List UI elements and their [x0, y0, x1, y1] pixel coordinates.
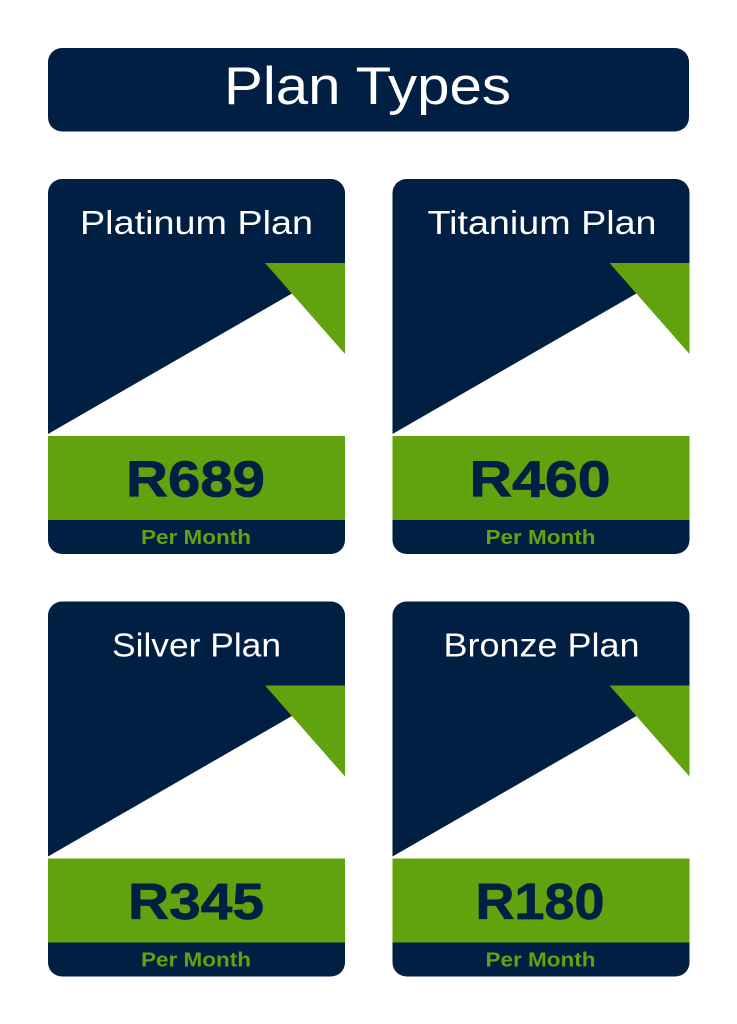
title banner: [48, 48, 689, 132]
panel: bronze plan: Bronze Plan: [444, 628, 640, 664]
panel: silver plan: R345: [128, 873, 264, 930]
panel: bronze plan: Per Month: [486, 948, 596, 972]
panel: titanium plan: R460: [470, 450, 610, 508]
panel: platinum plan: Per Month: [141, 526, 251, 549]
title: Plan Types: [224, 57, 511, 116]
panel: silver plan: Per Month: [141, 948, 251, 972]
panel: titanium plan: Per Month: [486, 526, 596, 549]
panel: silver plan: [48, 602, 345, 976]
panel: bronze plan: [392, 602, 690, 976]
panel: bronze plan: R180: [476, 873, 604, 930]
panel: platinum plan: R689: [126, 450, 265, 508]
panel: platinum plan: Platinum Plan: [80, 205, 313, 242]
panel: titanium plan: Titanium Plan: [428, 205, 656, 242]
panel: silver plan: Silver Plan: [112, 628, 281, 664]
panel: titanium plan: [392, 179, 690, 554]
panel: platinum plan: [48, 179, 345, 554]
